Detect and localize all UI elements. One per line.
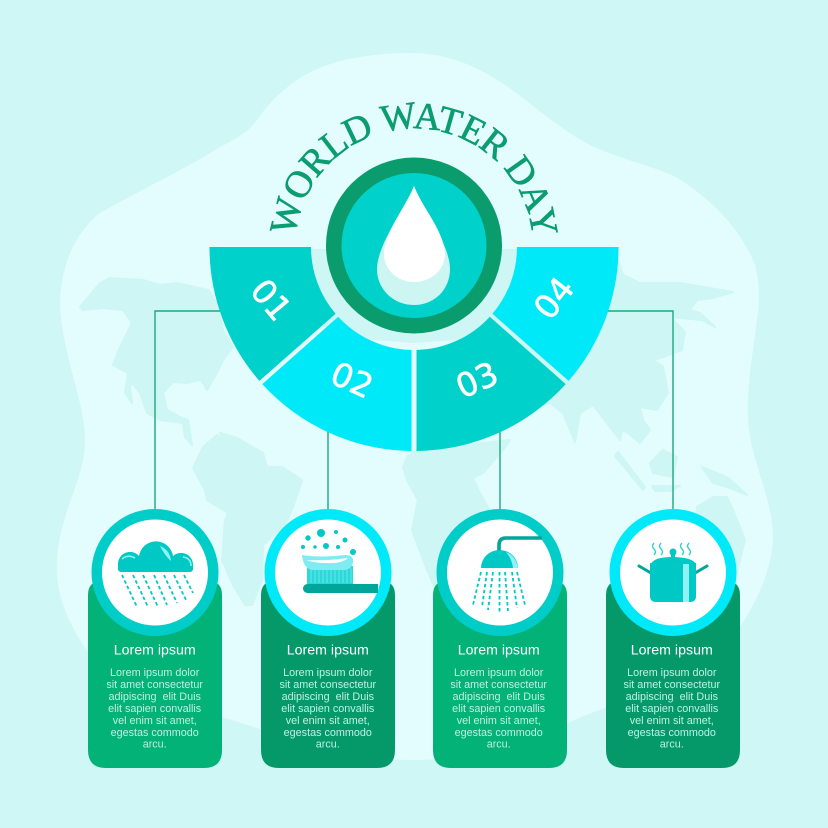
card [433,581,567,768]
connector 3 [499,430,501,512]
body text: sit amet consectetur [279,679,377,691]
panel 3: shower [433,509,567,768]
connector 4 [608,311,673,512]
heading: Lorem ipsum [287,642,369,658]
circle ring [610,509,736,636]
body text: elit sapien convallis [108,703,202,715]
body text: egestas commodo [284,727,372,739]
panel 2: toothbrush [261,509,395,768]
heading: Lorem ipsum [458,642,540,658]
world map [80,250,747,605]
icon: rain cloud [118,541,193,607]
number 03: 03 [450,354,504,406]
semicircle segments [210,247,618,451]
body text: Lorem ipsum dolor [454,667,544,679]
circle face [620,520,726,626]
body text: vel enim sit amet, [113,715,197,727]
segment 03 [416,317,566,451]
map: Europe behind emblem [305,250,525,342]
body text: sit amet consectetur [450,679,547,691]
body text: arcu. [660,738,684,750]
icon: water drop [377,186,450,305]
number 02: 02 [325,354,379,406]
segment 04 [492,247,618,381]
body text: sit amet consectetur [623,679,721,691]
body text: Lorem ipsum dolor [283,667,373,679]
circle ring [264,509,392,636]
body text: elit sapien convallis [452,703,546,715]
circle face [102,520,208,626]
body text: elit sapien convallis [281,703,375,715]
emblem inner disc [342,173,486,318]
icon: pot [639,543,707,602]
connector lines [155,311,673,512]
map: North America [80,278,233,445]
body text: adipiscing elit Duis [626,691,719,703]
map: Eurasia [420,260,733,443]
body text: Lorem ipsum dolor [110,667,200,679]
body text: Lorem ipsum dolor [627,667,717,679]
map: South America [193,433,302,605]
map: Java [652,486,680,491]
background blob [57,53,773,760]
body text: vel enim sit amet, [457,715,541,727]
map: Sumatra [615,452,645,490]
connector 1 [155,311,222,512]
center drop emblem [326,158,502,334]
body text: egestas commodo [111,727,199,739]
body text: egestas commodo [455,727,543,739]
map: Australia [690,497,745,580]
heading: Lorem ipsum [631,642,713,658]
body text: elit sapien convallis [625,703,719,715]
segment 02 [262,317,412,451]
body text: adipiscing elit Duis [452,691,546,703]
body text: arcu. [316,738,340,750]
circle ring [92,509,218,636]
segment 01 [210,247,336,381]
heading: Lorem ipsum [114,642,196,658]
title: WORLD WATER DAY [270,102,558,233]
panel 4: pot [606,509,740,768]
body text: vel enim sit amet, [630,715,714,727]
card [606,581,740,768]
card [88,581,222,768]
body text: arcu. [487,738,511,750]
panel 1: rain [88,509,222,768]
body text: arcu. [143,738,167,750]
map: New Guinea [702,467,747,495]
circle face [275,520,381,626]
body text: adipiscing elit Duis [282,691,375,703]
map: Borneo [650,450,677,477]
icon: shower [473,538,542,613]
body text: adipiscing elit Duis [108,691,202,703]
body text: vel enim sit amet, [286,715,370,727]
icon: water drop highlight [384,186,445,282]
body text: egestas commodo [628,727,716,739]
circle face [447,520,553,626]
card [261,581,395,768]
number 01: 01 [243,271,299,329]
circle ring [436,509,564,636]
body text: sit amet consectetur [106,679,203,691]
number 04: 04 [526,269,582,327]
icon: toothbrush [301,529,378,593]
map: Africa [403,440,510,600]
emblem outer ring [326,158,502,334]
connector 2 [327,430,329,512]
